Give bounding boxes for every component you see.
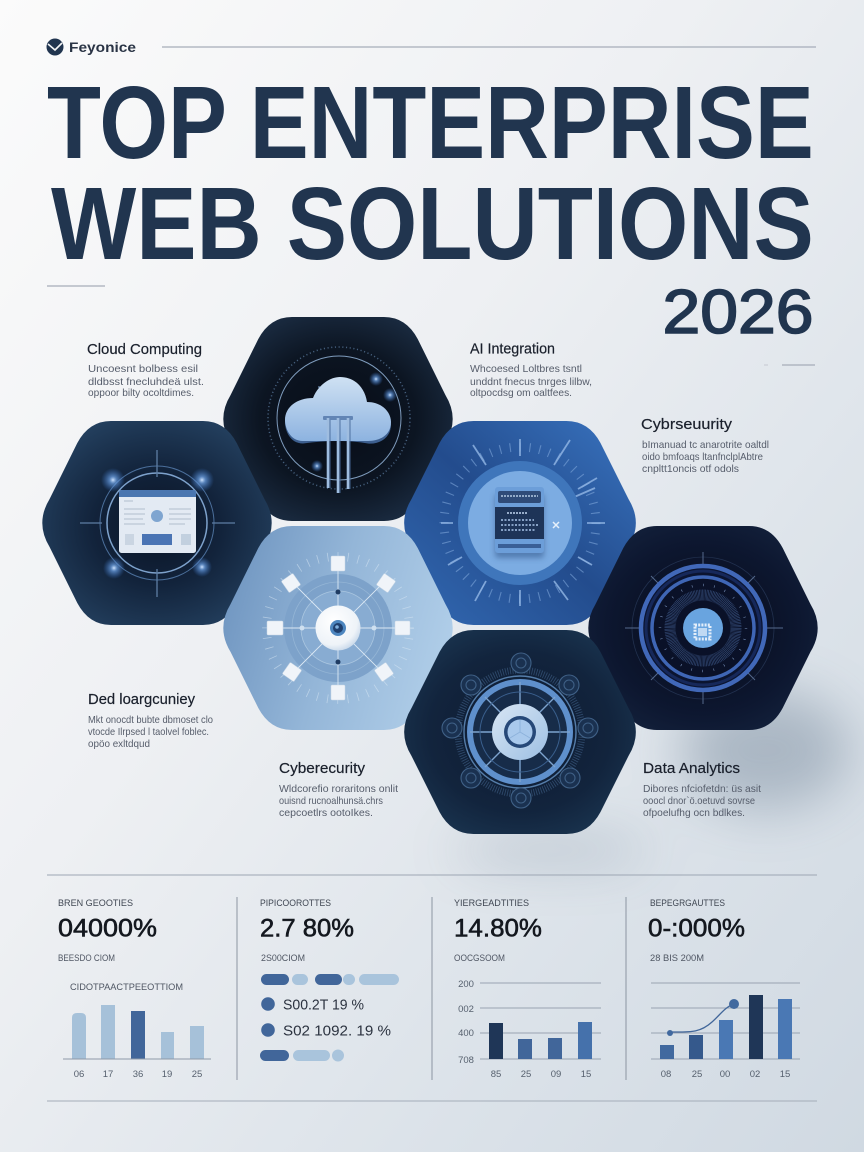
text block: left lower xyxy=(88,691,213,750)
text block: cloud computing: oppoor bilty ocoltdimes. xyxy=(88,387,194,399)
text block: cloud computing: dldbsst fnecluhdeä ulst. xyxy=(88,376,204,388)
text block: cybersecurity upper: cnpltt1oncis otf odols xyxy=(642,463,739,475)
title: TOP ENTERPRISE xyxy=(47,66,814,181)
stat panel 2: 2.7 80% xyxy=(260,914,354,942)
title: WEB SOLUTIONS xyxy=(51,165,814,281)
text block: cybersecurity upper: Cybrseuurity xyxy=(641,416,733,433)
icon: browser window xyxy=(119,490,196,553)
bar chart 3: 400 xyxy=(458,1028,474,1039)
combo chart 4: 08 xyxy=(661,1069,671,1080)
text block: cloud computing: Cloud Computing xyxy=(87,341,202,358)
text block: cloud computing xyxy=(87,341,204,399)
bar chart 3: 85 xyxy=(491,1069,501,1080)
stat panel 1 xyxy=(58,898,211,1080)
text block: data analytics: Dibores nfciofetdn: üs asit xyxy=(643,783,761,795)
pill legend: S00.2T 19 % xyxy=(283,996,364,1014)
text block: AI integration xyxy=(470,340,592,399)
stat panel 3: OOCGSOOM xyxy=(454,953,505,964)
stat panel 4 xyxy=(648,898,800,1080)
text block: AI integration: Whcoesed Loltbres tsntl xyxy=(470,363,582,375)
text block: cybersecurity upper: oido bmfoaqs ltanfnclplAbtre xyxy=(642,451,763,463)
bar chart 1: 25 xyxy=(192,1069,202,1080)
stat panel 3 xyxy=(454,898,601,1080)
stat panel 2 xyxy=(260,898,399,1062)
text block: cybersecurity lower: cepcoetlrs ootoIkes. xyxy=(279,807,373,819)
icon: network nodes xyxy=(267,556,410,700)
text block: data analytics: ooocl dnor`ö.oetuvd sovrse xyxy=(643,795,755,807)
text block: AI integration: oltpocdsg om oaltfees. xyxy=(470,387,572,399)
text block: data analytics: Data Analytics xyxy=(643,760,740,777)
bar chart 1: 36 xyxy=(133,1069,143,1080)
stat panel 1: 04000% xyxy=(58,914,157,942)
stat panel 2: PIPICOOROTTES xyxy=(260,898,331,909)
combo chart 4 xyxy=(651,983,800,1080)
icon: central hub xyxy=(492,704,548,760)
header: brand logo xyxy=(46,38,136,56)
bar chart 3 xyxy=(458,979,601,1080)
text block: left lower: Ded loargcuniey xyxy=(88,691,195,708)
panel: AI integration hexagon xyxy=(404,421,636,625)
icon: security core xyxy=(683,608,723,648)
panel: connected network hexagon xyxy=(223,526,453,730)
text block: cybersecurity upper xyxy=(641,416,769,475)
header: brand logo: Feyonice xyxy=(69,39,136,55)
stat panel 4: BEPEGRGAUTTES xyxy=(650,898,725,909)
panel: web platform hexagon xyxy=(42,421,272,625)
text block: cybersecurity lower: Wldcorefio roraritons onlit xyxy=(279,783,398,795)
panel: cybersecurity hexagon xyxy=(588,526,818,730)
combo chart 4: 25 xyxy=(692,1069,702,1080)
combo chart 4: 00 xyxy=(720,1069,730,1080)
text block: left lower: opöo exltdqud xyxy=(88,738,150,750)
bar chart 1 xyxy=(63,1005,211,1080)
year: 2026 xyxy=(662,277,814,346)
text block: cybersecurity lower: Cyberecurity xyxy=(279,760,365,777)
stat panel 1: CIDOTPAACTPEEOTTIOM xyxy=(70,982,183,993)
title xyxy=(47,66,814,281)
text block: data analytics xyxy=(643,760,761,819)
bar chart 1: 19 xyxy=(162,1069,172,1080)
stat panel 3: YIERGEADTITIES xyxy=(454,898,529,909)
icon: orbit badges xyxy=(442,653,598,808)
combo chart 4: 02 xyxy=(750,1069,760,1080)
bar chart 3: 200 xyxy=(458,979,474,990)
stat panel 4: 28 BIS 200M xyxy=(650,953,704,964)
text block: AI integration: unddnt fnecus tnrges lilbw, xyxy=(470,376,592,388)
bar chart 3: 15 xyxy=(581,1069,591,1080)
text block: left lower: Mkt onocdt bubte dbmoset clo xyxy=(88,714,213,726)
stat panel 1: BREN GEOOTIES xyxy=(58,898,133,909)
icon: server chip xyxy=(495,487,544,558)
pill legend: S02 1092. 19 % xyxy=(283,1022,391,1040)
bar chart 3: 09 xyxy=(551,1069,561,1080)
bar chart 3: 708 xyxy=(458,1055,474,1066)
stat panel 1: BEESDO CIOM xyxy=(58,953,115,964)
text block: cybersecurity lower xyxy=(279,760,398,819)
bar chart 3: 002 xyxy=(458,1004,474,1015)
text block: cloud computing: Uncoesnt bolbess esil xyxy=(88,363,198,375)
stat panel 3: 14.80% xyxy=(454,914,542,942)
panel: cloud computing hexagon xyxy=(223,317,453,521)
panel: data analytics hexagon xyxy=(404,630,636,834)
text block: left lower: vtocde Ilrpsed l taolvel foblec. xyxy=(88,726,209,738)
stat panel 2: 2S00CIOM xyxy=(261,953,305,964)
icon: central eye sphere xyxy=(316,606,360,650)
bar chart 1: 17 xyxy=(103,1069,113,1080)
text block: cybersecurity lower: ouisnd rucnoalhunsä.chrs xyxy=(279,795,383,807)
soft shadow behind hexagons xyxy=(450,690,850,862)
bar chart 3: 25 xyxy=(521,1069,531,1080)
text block: data analytics: ofpoelufhg ocn bdlkes. xyxy=(643,807,745,819)
stat panel 4: 0-:000% xyxy=(648,914,745,942)
text block: AI integration: AI Integration xyxy=(470,340,555,358)
text block: cybersecurity upper: bImanuad tc anarotrite oaltdl xyxy=(642,439,769,451)
pill legend xyxy=(260,974,399,1062)
icon: cloud xyxy=(285,377,391,493)
bar chart 1: 06 xyxy=(74,1069,84,1080)
combo chart 4: 15 xyxy=(780,1069,790,1080)
